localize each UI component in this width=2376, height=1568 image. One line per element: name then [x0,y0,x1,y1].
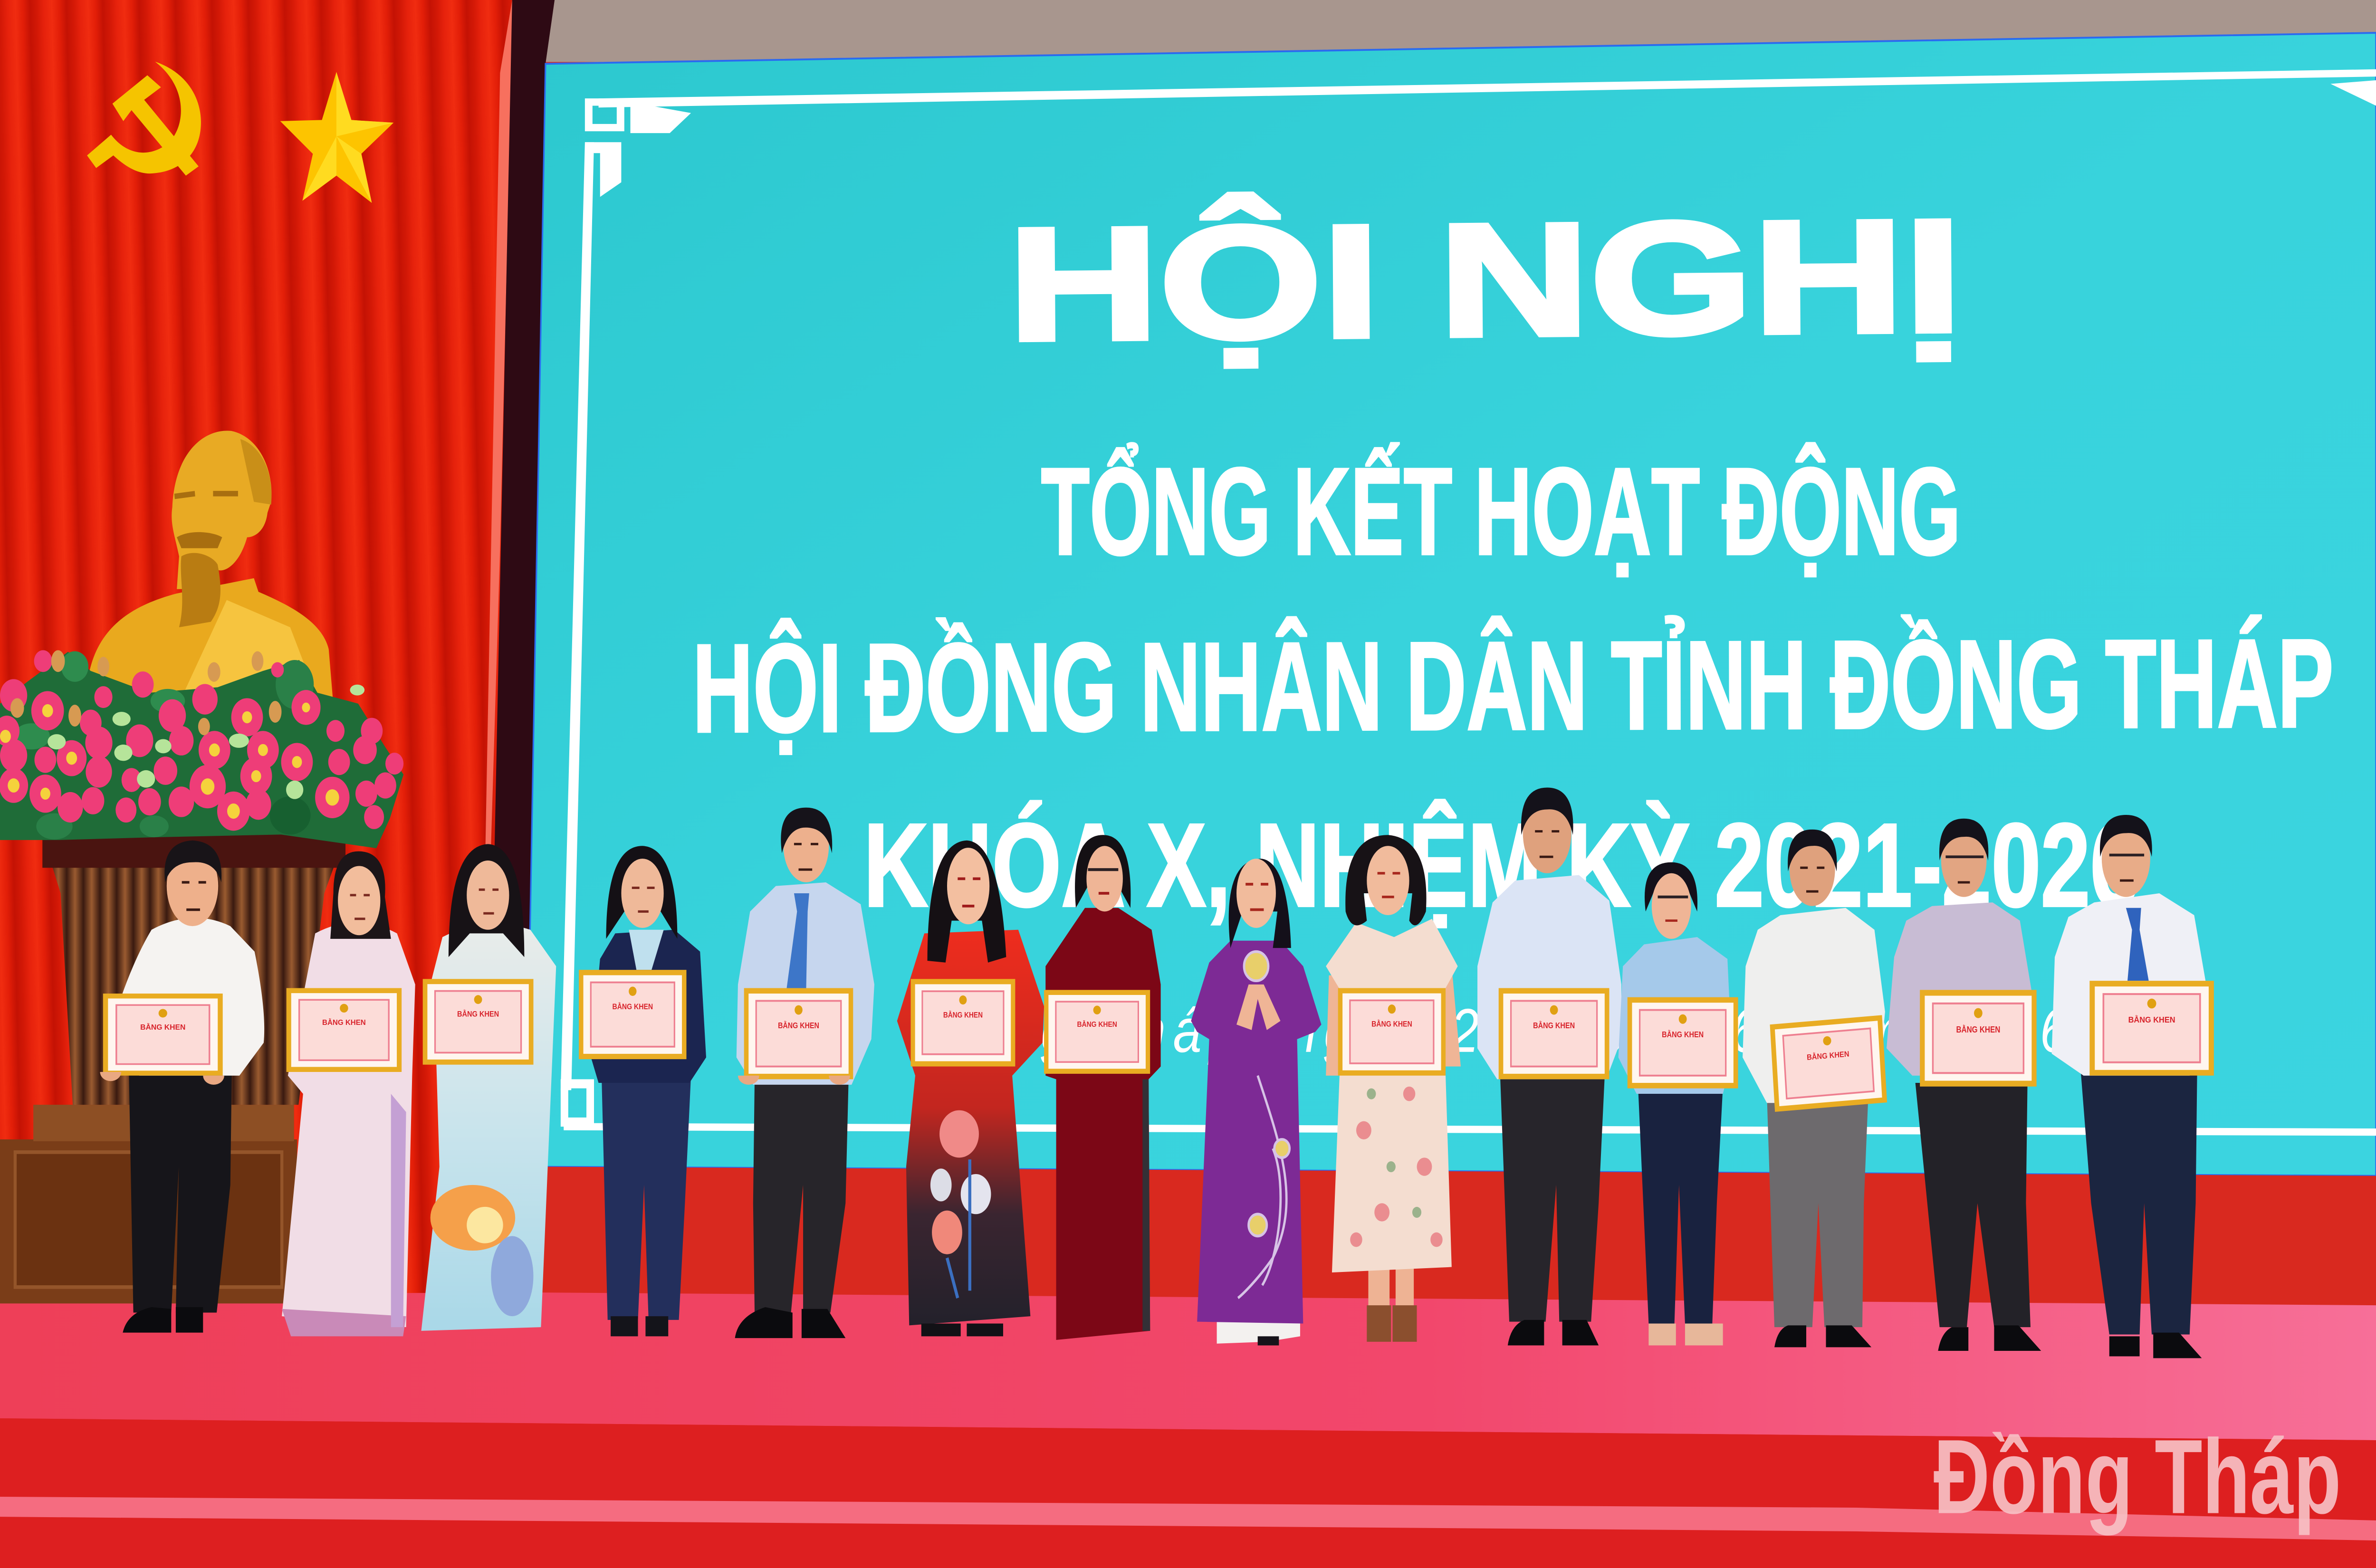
person 10: man in light blue shirt [1477,787,1621,1346]
heading: HỘI NGHỊ: HỘI NGHỊ [1007,186,1963,374]
shirt [103,918,264,1076]
sandals [1367,1305,1417,1342]
shoe [1258,1336,1279,1346]
certificate: BẰNG KHEN [778,1021,819,1030]
certificate [1628,997,1738,1089]
dark side curtain [488,0,555,1167]
dress [421,924,556,1331]
hair [1075,835,1131,908]
hair [449,844,524,957]
background wall and ceiling [515,0,2376,62]
head [2102,821,2150,897]
certificate: BẰNG KHEN [1371,1019,1412,1029]
white trousers [1217,1312,1300,1344]
emblem: gold star [280,72,393,203]
legs [1368,1267,1414,1331]
shoes [1508,1320,1599,1346]
embroidery [1238,952,1290,1298]
emblem: hammer and sickle [87,62,201,176]
certificate: BẰNG KHEN [457,1010,499,1019]
lotus flowers [0,650,403,831]
lotus pods [48,685,364,799]
dress [1191,941,1322,1323]
shirt [1619,937,1732,1094]
head [1523,793,1571,873]
trousers [1916,1083,2031,1327]
hair [928,841,1006,963]
person 12: man in white uniform shirt [1743,830,1887,1347]
tie [786,893,809,990]
certificate [287,988,402,1072]
certificate [744,988,853,1079]
head [1652,873,1691,939]
person 2: woman in white ao dai [282,851,415,1336]
head [1086,846,1123,911]
shoes [123,1307,203,1333]
certificate [579,970,686,1059]
trousers [753,1079,849,1312]
red curtain [0,0,541,1305]
person 11: woman in pale blue shirt [1619,862,1738,1346]
certificate: BẰNG KHEN [1533,1021,1575,1030]
bust statue [86,430,333,704]
dress [1045,908,1161,1340]
floral print [1350,1087,1443,1247]
flower print [930,1110,991,1298]
arms [1326,966,1461,1076]
person 14: man in white shirt and blue tie [2052,815,2214,1358]
tie [2126,908,2149,981]
trousers [602,1076,691,1320]
certificate: BẰNG KHEN [1807,1049,1849,1062]
shirt [1477,875,1621,1079]
head [1790,833,1835,906]
dress [1326,919,1458,1272]
trousers [1638,1087,1723,1323]
dress [282,922,415,1327]
certificate [423,979,533,1065]
hair [1229,859,1291,948]
red stage front wall [541,1167,2376,1305]
certificate: BẰNG KHEN [1662,1030,1704,1039]
person 3: woman in floral ao dai [421,844,556,1331]
trousers [129,1067,232,1312]
person 9: woman in floral dress [1326,835,1461,1342]
person 5: man in blue shirt and tie [735,808,874,1338]
hands [100,1072,224,1085]
hair [1645,862,1697,911]
certificate: BẰNG KHEN [613,1002,653,1011]
shoes [2109,1333,2202,1358]
shoes [611,1316,668,1336]
hands [738,1076,850,1085]
screen border frame [561,69,2376,1136]
head [1941,824,1986,897]
hair [330,851,391,939]
certificate: BẰNG KHEN [2128,1014,2175,1024]
subheading: KHÓA X, NHIỆM KỲ 2021-2026: KHÓA X, NHIỆM KỲ 2021-2026 [864,799,2140,931]
certificate: BẰNG KHEN [140,1023,185,1032]
trousers [1500,1076,1605,1322]
person 4: woman in navy jacket [579,846,706,1336]
trousers [2080,1068,2197,1335]
flower arrangement [0,650,403,848]
head [1367,846,1409,915]
head [338,866,380,935]
clapping hands [1236,985,1281,1030]
date line: Đồng Tháp, ngày 22 tháng 6 năm 2026 [924,996,2069,1065]
person 1: man in white shirt [100,841,264,1333]
head [621,859,664,928]
certificate [1920,990,2037,1087]
LED screen [526,33,2376,1176]
certificate: BẰNG KHEN [943,1010,983,1020]
certificate [1770,1015,1887,1112]
hair [1345,835,1427,925]
person 8: woman in purple ao dai clapping [1191,859,1322,1346]
certificate [2089,981,2214,1076]
trousers [1767,1094,1868,1327]
head [167,846,218,926]
shirt [2052,893,2209,1076]
pedestal [0,832,345,1303]
head [467,860,509,930]
certificate [1044,990,1150,1074]
person 6: woman in red ao dai [897,841,1044,1336]
shirt [1887,902,2032,1076]
shoes [1774,1325,1871,1347]
shoes [1938,1325,2041,1351]
certificate: BẰNG KHEN [1956,1025,2000,1034]
person 7: woman in dark red velvet ao dai [1044,835,1161,1340]
certificate [1338,988,1446,1076]
stage step edge [0,1497,2376,1540]
certificate [910,979,1015,1067]
dress [897,930,1044,1325]
dress flower print [431,1185,533,1316]
lotus buds [10,650,281,735]
certificate: BẰNG KHEN [322,1018,366,1027]
head [1236,859,1276,928]
person 13: man in lilac striped shirt [1887,819,2041,1351]
shirt [737,882,874,1085]
stage step riser [0,1418,2376,1568]
certificate [1499,988,1610,1079]
subheading: TỔNG KẾT HOẠT ĐỘNG: TỔNG KẾT HOẠT ĐỘNG [1041,442,1961,581]
shoes [921,1323,1003,1336]
certificate [103,994,223,1076]
shoes [1648,1323,1723,1346]
head [947,848,989,924]
leaves [0,651,403,848]
shoes [735,1307,845,1338]
flower centres [0,703,339,819]
certificate: BẰNG KHEN [1077,1020,1117,1029]
head [784,810,829,882]
stage floor [0,1292,2376,1440]
hair [606,846,677,939]
shirt [1743,908,1885,1103]
jacket [591,930,706,1083]
